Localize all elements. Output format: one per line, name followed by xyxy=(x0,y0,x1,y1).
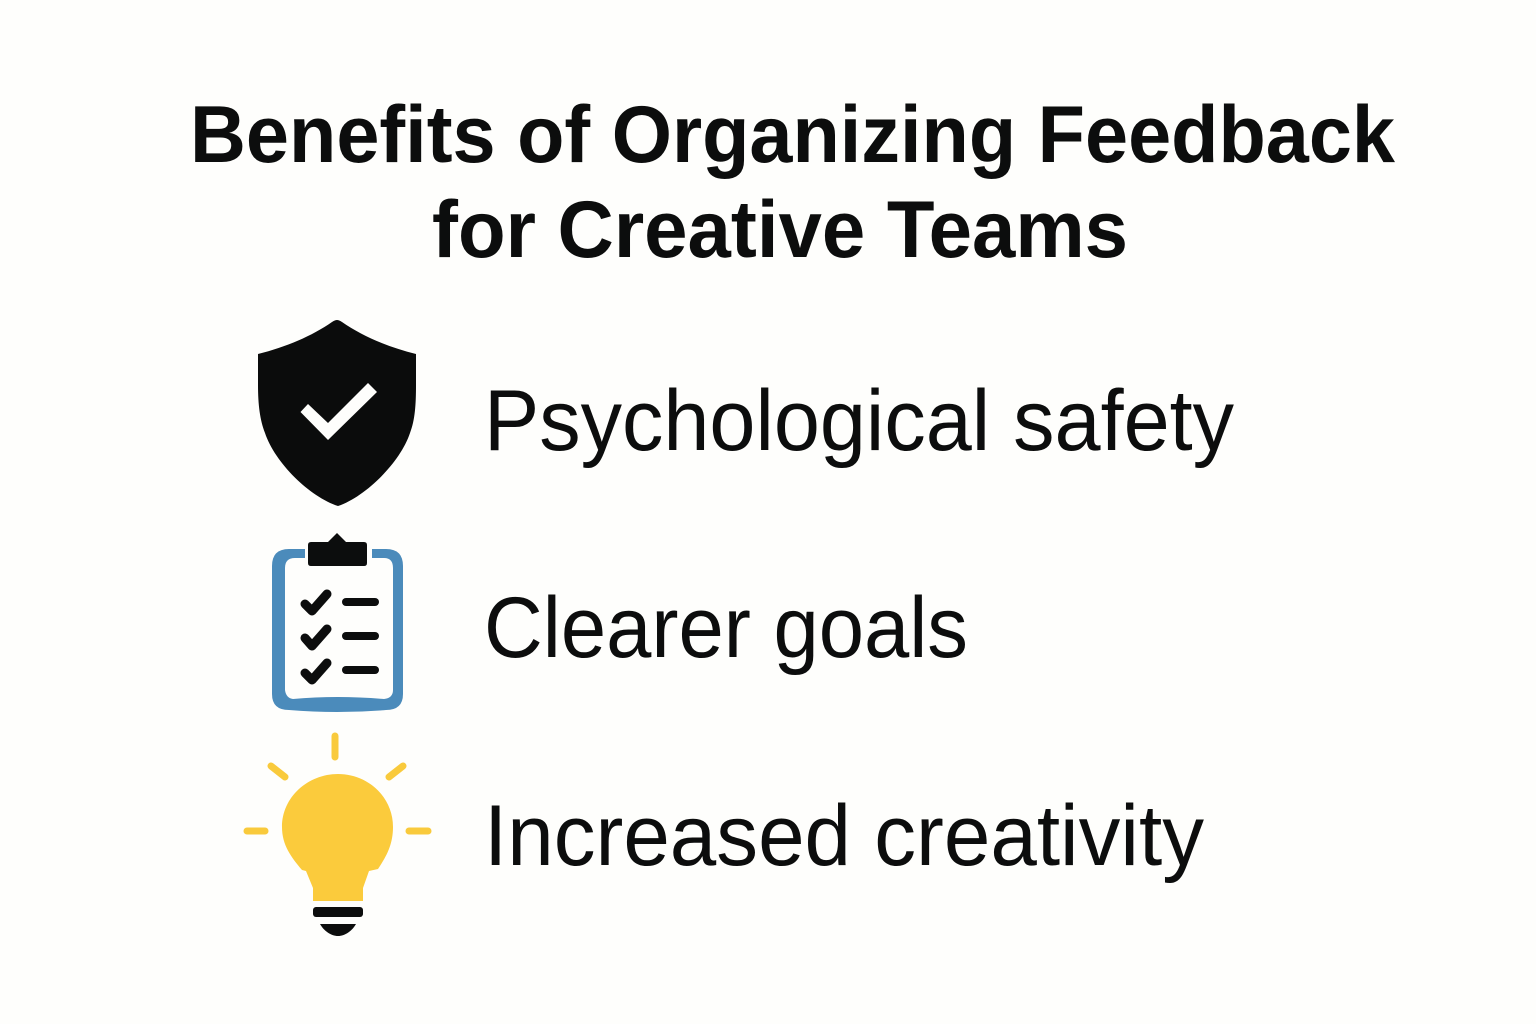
icon: light bulb xyxy=(247,736,428,936)
title: for Creative Teams xyxy=(432,185,1128,275)
label: increased creativity: Increased creativity xyxy=(484,788,1204,884)
label: psychological safety: Psychological safety xyxy=(484,373,1234,469)
row: increased creativity xyxy=(247,736,1204,936)
icon: shield with check xyxy=(258,320,416,506)
title xyxy=(190,90,1396,275)
row: clearer goals xyxy=(272,533,968,712)
icon: clipboard checklist xyxy=(272,533,403,712)
label: clearer goals: Clearer goals xyxy=(484,580,968,676)
title: Benefits of Organizing Feedback xyxy=(190,90,1396,180)
row: psychological safety xyxy=(258,320,1234,506)
